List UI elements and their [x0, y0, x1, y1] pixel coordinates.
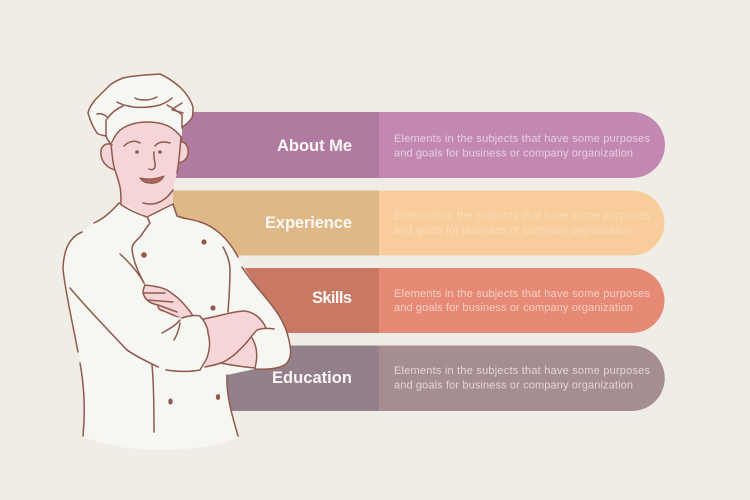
text: about me description: and goals for business or company organization	[394, 148, 633, 160]
panel: skills	[200, 268, 664, 333]
text: about me description: Elements in the subjects that have some purposes	[394, 133, 650, 145]
crossed arms	[127, 285, 274, 372]
panel: experience	[150, 190, 664, 256]
chef coat	[63, 203, 291, 450]
panel: education	[200, 346, 665, 411]
panel: about me	[150, 112, 665, 178]
chef hat	[88, 74, 193, 145]
text: skills description: Elements in the subjects that have some purposes	[394, 288, 650, 300]
heading: education: Education	[272, 369, 352, 387]
text: experience description: Elements in the subjects that have some purposes	[394, 210, 650, 222]
text: experience description: and goals for business or company organization	[394, 224, 633, 236]
heading: about me: About Me	[277, 137, 352, 155]
text: education description: Elements in the subjects that have some purposes	[394, 365, 650, 377]
heading: skills: Skills	[312, 289, 352, 307]
text: skills description: and goals for business or company organization	[394, 302, 633, 314]
heading: experience: Experience	[265, 214, 352, 232]
text: education description: and goals for business or company organization	[394, 380, 633, 392]
illustration: chef with crossed arms	[63, 74, 291, 450]
neck and face	[101, 118, 188, 217]
